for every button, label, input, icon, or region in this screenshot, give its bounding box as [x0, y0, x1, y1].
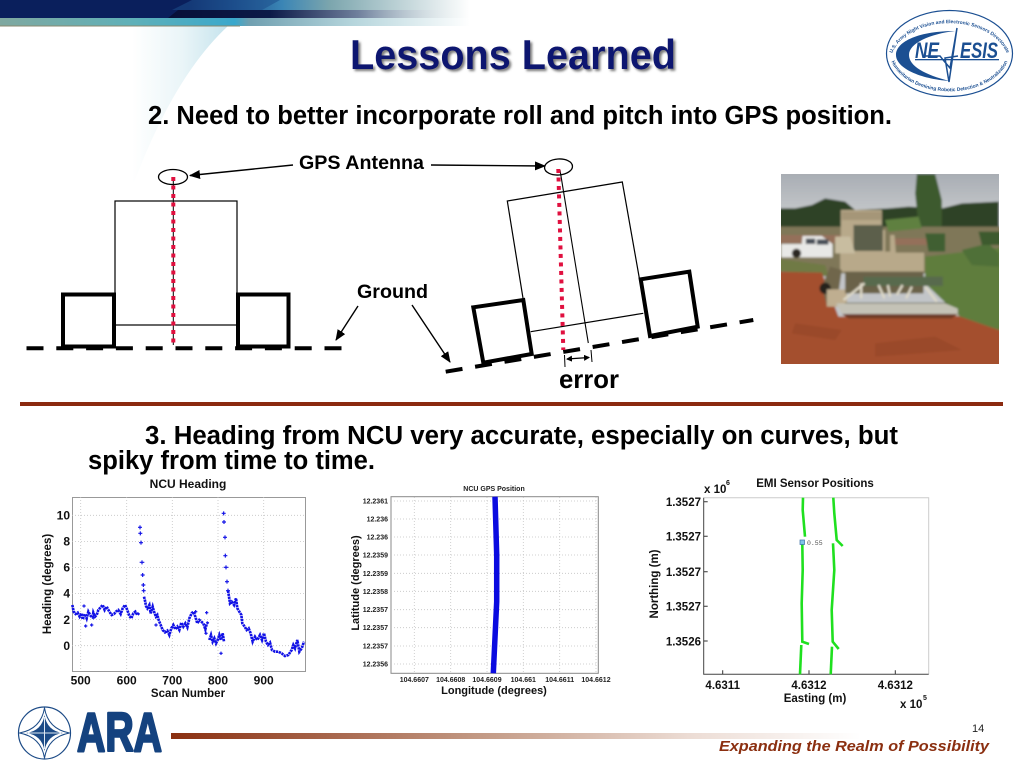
heading chart labels: 0 — [63, 639, 70, 653]
GPS chart labels — [350, 486, 611, 697]
EMI chart labels: 1.3527 — [666, 497, 701, 509]
EMI chart labels: 5 — [923, 695, 927, 702]
EMI chart labels: 4.6312 — [878, 680, 913, 692]
logo: ARA — [18, 701, 162, 763]
text: point 2: 2. Need to better incorporate roll and pitch into GPS position. — [148, 102, 892, 130]
heading chart labels: 8 — [63, 534, 70, 548]
GPS chart labels: 12.2356 — [363, 662, 388, 668]
label: Ground: Ground — [357, 281, 428, 303]
logo: NEMESIS — [886, 10, 1014, 98]
GPS chart labels: 12.236 — [367, 516, 388, 524]
logo: NEMESIS: U.S. Army Night Vision and Electronic Sensors Directorate — [889, 20, 1009, 53]
heading chart labels: NCU Heading — [150, 477, 226, 491]
chart: NCU GPS Position — [350, 486, 611, 697]
EMI chart labels: 1.3526 — [666, 636, 701, 648]
EMI chart labels — [649, 478, 927, 711]
GPS chart labels: 12.2359 — [363, 552, 388, 560]
label: Ground — [336, 281, 450, 362]
heading chart labels: 10 — [57, 508, 70, 522]
GPS chart labels: 104.6612 — [581, 677, 611, 684]
GPS chart labels: 12.2357 — [363, 644, 388, 650]
heading chart labels: 500 — [71, 674, 91, 688]
page number: 14 — [972, 723, 984, 735]
EMI chart labels: 6 — [726, 480, 730, 487]
heading chart labels: Heading (degrees) — [42, 534, 54, 634]
text: point 3 — [88, 422, 899, 475]
GPS chart labels: 12.2358 — [363, 589, 388, 596]
data tip marker — [800, 540, 823, 547]
heading chart labels: 700 — [162, 674, 183, 688]
sensor tracks — [800, 498, 843, 674]
GPS chart labels: 104.661 — [511, 677, 536, 684]
EMI chart labels: EMI Sensor Positions — [756, 478, 874, 490]
EMI chart labels: 1.3527 — [666, 602, 701, 614]
chart: NCU Heading — [42, 477, 306, 700]
title: Lessons Learned — [350, 31, 676, 78]
EMI chart labels: Northing (m) — [649, 549, 661, 618]
heading chart labels: 800 — [208, 674, 228, 688]
diagram: level vehicle — [26, 170, 342, 348]
photo: robotic vehicle in field — [781, 174, 999, 364]
GPS chart labels: 104.6608 — [436, 677, 465, 684]
GPS chart labels: 12.2357 — [363, 625, 388, 632]
footer bar — [171, 733, 861, 739]
footer tagline: Expanding the Realm of Possibility — [719, 739, 990, 755]
divider — [20, 402, 1003, 406]
EMI chart labels: 1.3527 — [666, 532, 701, 544]
logo: NEMESIS: ESIS — [960, 38, 998, 63]
text: point 3: spiky from time to time. — [88, 447, 375, 475]
GPS chart labels: 104.6609 — [472, 677, 502, 684]
heading chart labels: 2 — [63, 613, 70, 627]
header banner — [0, 0, 470, 200]
heading chart labels — [42, 477, 274, 700]
heading chart labels: 6 — [63, 560, 70, 574]
heading chart labels: 600 — [117, 674, 137, 688]
EMI chart labels: 4.6311 — [705, 680, 741, 692]
logo: ARA: ARA — [77, 701, 162, 763]
GPS chart labels: 12.2359 — [363, 571, 388, 578]
GPS chart labels: NCU GPS Position — [463, 486, 525, 493]
label: error: error — [559, 366, 619, 394]
logo: NEMESIS: NE — [915, 38, 940, 63]
text: point 3: 3. Heading from NCU very accurate, especially on curves, but — [145, 422, 899, 450]
EMI chart labels: 4.6312 — [791, 680, 827, 692]
EMI chart labels: x 10 — [704, 484, 726, 496]
GPS chart labels: Latitude (degrees) — [350, 535, 362, 631]
heading scatter points — [72, 511, 304, 656]
GPS chart labels: 12.2357 — [363, 607, 388, 614]
logo: NEMESIS: Humanitarian Demining Robotic Detection & Neutralization — [892, 60, 1008, 92]
chart: EMI Sensor Positions — [649, 478, 929, 711]
label: GPS Antenna: GPS Antenna — [299, 152, 425, 174]
GPS chart labels: Longitude (degrees) — [441, 685, 547, 697]
data tip marker: 0.55 — [807, 540, 823, 547]
diagram: tilted vehicle — [446, 158, 753, 372]
EMI chart labels: 1.3527 — [666, 567, 701, 579]
GPS chart labels: 12.2361 — [363, 498, 388, 506]
GPS chart labels: 104.6611 — [545, 677, 574, 684]
EMI chart labels: Easting (m) — [784, 693, 846, 705]
label: GPS Antenna — [190, 152, 545, 176]
heading chart labels: 900 — [254, 674, 274, 688]
EMI chart labels: x 10 — [900, 699, 922, 711]
heading chart labels: Scan Number — [151, 688, 226, 700]
heading chart labels: 4 — [63, 586, 70, 600]
GPS chart labels: 104.6607 — [400, 677, 429, 684]
GPS chart labels: 12.236 — [367, 534, 388, 542]
